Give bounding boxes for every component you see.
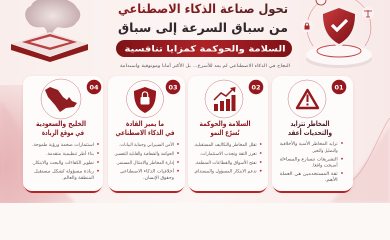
- bullet list: [114, 141, 179, 181]
- bullet list: ثقة المستخدمين هي العملة: [280, 172, 339, 177]
- banner: السلامة والحوكمة كمزايا تنافسية: [124, 44, 286, 54]
- bullet list: وحقوق الإنسان.: [143, 175, 174, 181]
- heading: [200, 120, 250, 137]
- bullet list: [280, 140, 343, 183]
- icon: top badge: [316, 0, 326, 5]
- bullet list: تقلل المخاطر والتكاليف المستقبلية.: [194, 142, 257, 148]
- bullet list: تدعم الابتكار المسؤول والمستدام.: [194, 169, 257, 175]
- badge 04: 04: [89, 84, 99, 92]
- bullet list: استثمارات ضخمة ورؤية طموحة.: [32, 143, 94, 148]
- bullet list: التشريعات تتسارع والمساءلة: [280, 158, 338, 163]
- bullet list: إدارة المخاطر والامتثال المستمر.: [116, 161, 175, 166]
- heading: والتحديات أعقد: [288, 128, 332, 137]
- heading: ما يميز القادة: [126, 120, 164, 128]
- icon: shield lock: [126, 80, 164, 118]
- bullet list: المنطقة والعالم.: [62, 176, 94, 181]
- illustration: brain on chip: [11, 0, 88, 62]
- illustration: shield on pedestal: [301, 0, 374, 68]
- icon: growth chart: [205, 80, 243, 118]
- icon: warning triangle: [288, 80, 326, 118]
- subtitle: النجاح في الذكاء الاصطناعي لم يعد للأسرع... بل الأكثر أمانا وموثوقية واستدامة: [120, 62, 290, 69]
- badge 01: 01: [334, 84, 344, 92]
- bullet list: [32, 143, 99, 181]
- title: [118, 1, 288, 35]
- title: من سباق السرعة إلى سباق: [118, 20, 288, 35]
- bullet list: ريادة مسؤولة تُشكل مستقبل: [34, 169, 94, 175]
- heading: الخليج والسعودية: [36, 120, 86, 128]
- bullet list: [194, 142, 262, 175]
- badge 02: 02: [251, 84, 261, 92]
- icon: lock badge: [301, 20, 313, 32]
- bullet list: الأهم.: [325, 176, 338, 183]
- bullet list: بناء أطر تنظيمية متقدمة.: [46, 150, 94, 157]
- icon: scale badge: [362, 7, 374, 19]
- heading: المخاطر تتزايد: [290, 120, 330, 128]
- bullet list: تعزز الثقة وتجذب الاستثمارات.: [200, 152, 257, 157]
- panel: 01 risks: [272, 76, 353, 193]
- icon: chip platform: [11, 32, 88, 62]
- pedestal: [306, 45, 372, 68]
- panel: 02 growth: [188, 76, 268, 193]
- bullet list: الحوكمة والشفافية والقابلية للتفسير.: [114, 151, 174, 157]
- heading: [36, 120, 86, 137]
- icon: shield: [320, 5, 358, 47]
- heading: السلامة والحوكمة: [200, 120, 250, 128]
- title: تحول صناعة الذكاء الاصطناعي: [118, 1, 288, 16]
- badge 03: 03: [168, 84, 178, 92]
- banner: [116, 40, 292, 57]
- bullet list: تزايد المخاطر الأمنية والأخلاقية: [280, 140, 338, 147]
- bullet list: تفتح الأسواق والقطاعات المنظمة.: [195, 159, 257, 166]
- bullet list: والتضليل والتحيز.: [312, 149, 338, 154]
- bullet list: تطوير الكفاءات والبحث والابتكار.: [32, 160, 95, 166]
- panel: 04 gulf: [23, 76, 103, 193]
- bullet list: الأمن السيبراني وحماية البيانات.: [119, 141, 174, 148]
- heading: في الذكاء الاصطناعي: [116, 129, 175, 137]
- heading: تُسرّع النمو: [210, 128, 240, 137]
- icon: brain: [25, 0, 80, 34]
- heading: [116, 120, 175, 137]
- heading: [288, 120, 332, 137]
- bullet list: أخلاقيات الذكاء الاصطناعي: [120, 168, 175, 175]
- heading: في موقع الريادة: [42, 129, 84, 137]
- panel: 03 leaders: [108, 76, 185, 193]
- icon: gulf map: [41, 79, 81, 119]
- bullet list: أصبحت واقعا.: [312, 162, 338, 169]
